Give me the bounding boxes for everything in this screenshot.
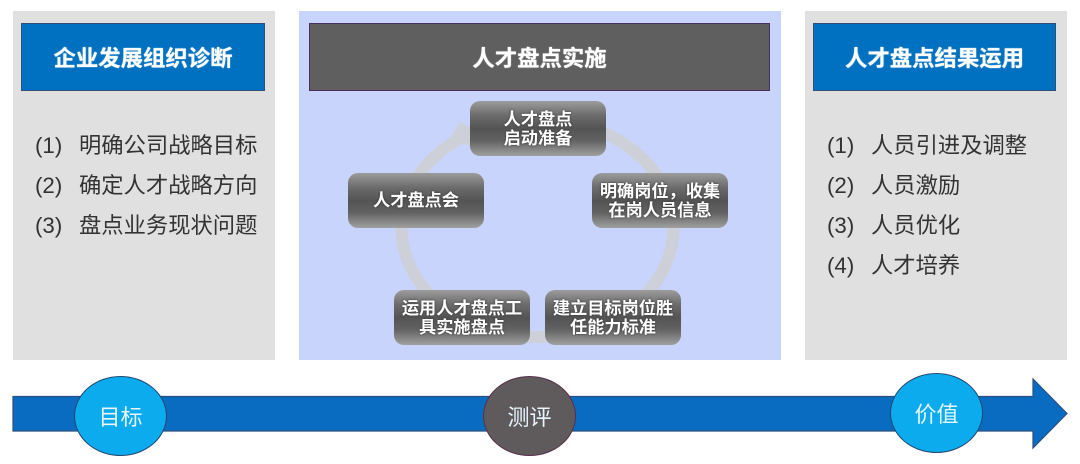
text block: diagnosis list: 明确公司战略目标 xyxy=(79,133,257,158)
text block: application list: 人才培养 xyxy=(871,253,960,278)
circle: 目标: 目标 xyxy=(98,405,142,430)
circle: 价值 xyxy=(890,373,983,453)
panel: 人才盘点结果运用 xyxy=(805,11,1067,360)
text block: application list: (4) xyxy=(827,253,854,278)
cycle step: 运用人才盘点工具实施盘点: 具实施盘点 xyxy=(419,316,505,336)
text block: diagnosis list xyxy=(35,133,257,238)
cycle step: 明确岗位，收集在岗人员信息 xyxy=(592,173,728,228)
cycle step: 人才盘点启动准备: 启动准备 xyxy=(504,128,572,148)
text block: application list: (3) xyxy=(827,213,854,238)
text block: diagnosis list: (1) xyxy=(35,133,62,158)
text block: application list: (2) xyxy=(827,173,854,198)
panel: 人才盘点实施 xyxy=(299,11,781,360)
cycle step: 运用人才盘点工具实施盘点: 运用人才盘点工 xyxy=(402,298,522,318)
circle: 价值: 价值 xyxy=(914,402,958,427)
heading: 企业发展组织诊断: 企业发展组织诊断 xyxy=(53,46,233,71)
heading: 企业发展组织诊断 xyxy=(21,23,265,91)
cycle step: 人才盘点启动准备 xyxy=(470,101,606,156)
text block: application list: (1) xyxy=(827,133,854,158)
cycle ring arrow xyxy=(396,122,680,343)
circle: 目标 xyxy=(74,376,167,456)
cycle step: 建立目标岗位胜任能力标准 xyxy=(545,290,681,345)
cycle step: 明确岗位，收集在岗人员信息: 在岗人员信息 xyxy=(608,200,712,220)
cycle step: 人才盘点启动准备: 人才盘点 xyxy=(504,108,572,128)
heading: 人才盘点实施 xyxy=(309,23,770,91)
text block: diagnosis list: 确定人才战略方向 xyxy=(79,173,257,198)
cycle step: 建立目标岗位胜任能力标准: 任能力标准 xyxy=(570,316,656,336)
text block: diagnosis list: 盘点业务现状问题 xyxy=(79,213,257,238)
cycle step: 明确岗位，收集在岗人员信息: 明确岗位，收集 xyxy=(600,180,720,200)
cycle step: 人才盘点会 xyxy=(348,173,484,228)
text block: application list: 人员激励 xyxy=(871,173,960,198)
circle: 测评 xyxy=(483,376,576,456)
text block: application list: 人员引进及调整 xyxy=(871,133,1027,158)
text block: diagnosis list: (3) xyxy=(35,213,62,238)
text block: application list xyxy=(827,133,1027,278)
text block: diagnosis list: (2) xyxy=(35,173,62,198)
heading: 人才盘点结果运用 xyxy=(813,23,1056,91)
circle: 测评: 测评 xyxy=(507,405,552,430)
heading: 人才盘点实施: 人才盘点实施 xyxy=(472,46,607,71)
heading: 人才盘点结果运用: 人才盘点结果运用 xyxy=(845,46,1024,71)
timeline arrow xyxy=(12,378,1068,450)
cycle step: 人才盘点会: 人才盘点会 xyxy=(373,190,459,210)
text block: application list: 人员优化 xyxy=(871,213,960,238)
cycle step: 建立目标岗位胜任能力标准: 建立目标岗位胜 xyxy=(553,298,673,318)
cycle step: 运用人才盘点工具实施盘点 xyxy=(394,290,530,345)
panel: 企业发展组织诊断 xyxy=(13,11,275,360)
